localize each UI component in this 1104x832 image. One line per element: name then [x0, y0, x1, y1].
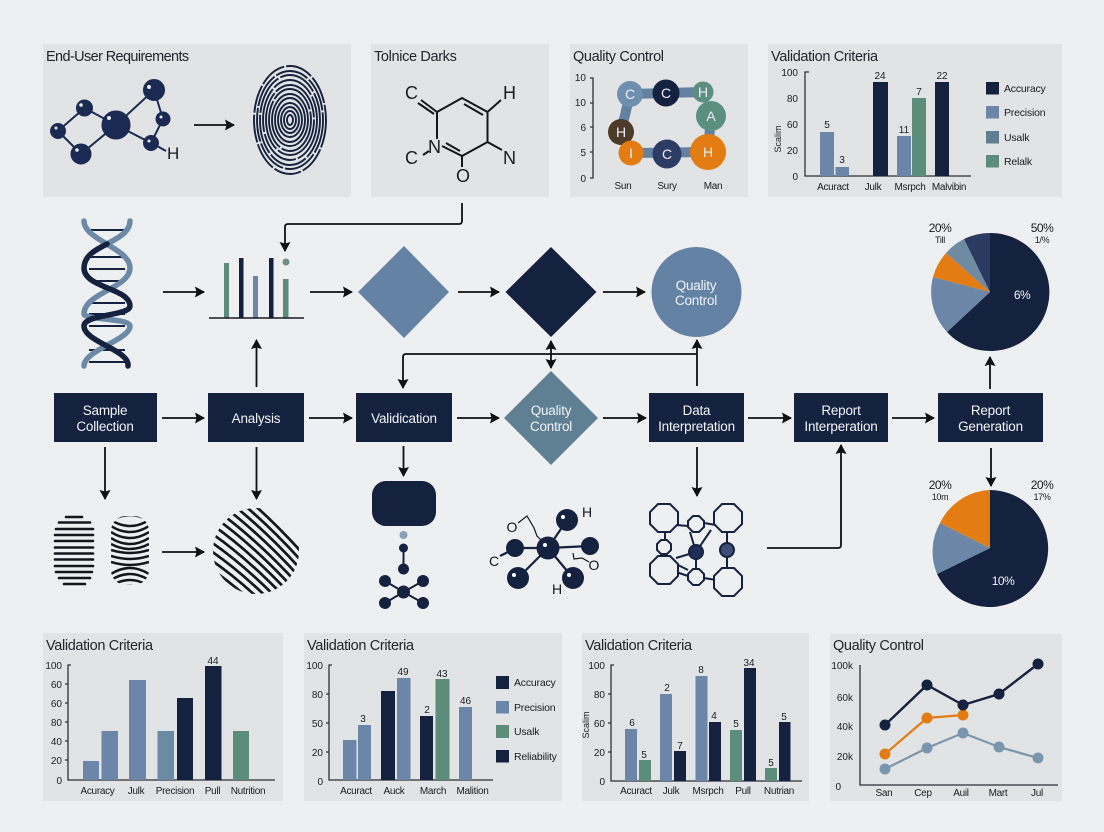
bar chart — [581, 658, 802, 797]
arrow: diamond to navy diamond — [458, 291, 499, 293]
heading: validation criteria: Validation Criteria — [771, 49, 879, 65]
pie chart: upper — [929, 221, 1054, 351]
line chart: Mart — [989, 788, 1008, 799]
line chart: Jul — [1031, 788, 1043, 799]
bar chart: 2 — [664, 683, 670, 694]
bar chart: Julk — [128, 786, 146, 797]
node: quality control circle: Quality — [676, 278, 717, 293]
arrow: dna to chart — [163, 291, 204, 293]
node: quality control diamond — [504, 371, 598, 465]
pie chart: upper: 1/% — [1035, 235, 1050, 245]
panel: end-user requirements — [43, 44, 351, 197]
bar chart: Auck — [383, 786, 406, 797]
arrow — [162, 417, 204, 419]
x labels: Sun — [615, 181, 631, 192]
bar chart: Precision — [156, 786, 194, 797]
legend — [496, 676, 558, 763]
bar chart: 80 — [51, 718, 62, 729]
diamond: navy — [506, 247, 596, 337]
ring of atoms: H — [616, 124, 626, 140]
arrow: navy diamond to circle — [603, 291, 645, 293]
arrow: report up to pie — [989, 357, 991, 389]
bar chart: 5 — [641, 750, 647, 761]
bar chart: 5 — [768, 758, 774, 769]
line chart: 0 — [835, 782, 841, 793]
panel: validation criteria bottom 3 — [581, 633, 809, 801]
bar chart: Julk — [865, 182, 883, 193]
bar chart: 34 — [743, 658, 755, 669]
node: quality control diamond: Quality — [531, 403, 572, 418]
box: report interpretation: Interperation — [804, 419, 878, 434]
pie chart: upper: 50% — [1031, 221, 1054, 235]
panel: validation criteria bottom 2 — [304, 633, 562, 801]
bar chart: 8 — [698, 665, 704, 676]
axis: 10 — [575, 98, 586, 109]
box: report generation: Generation — [958, 419, 1023, 434]
bar chart: 20 — [594, 748, 605, 759]
bar chart: 6 — [629, 718, 635, 729]
icon: molecule — [51, 80, 170, 164]
bar chart: Acuract — [340, 786, 372, 797]
icon: curved fingerprint — [111, 516, 149, 585]
arrow: down from sample collection — [104, 447, 106, 499]
bar chart: 20 — [51, 756, 62, 767]
axis: 10 — [575, 73, 586, 84]
line chart: 60k — [837, 693, 854, 704]
bar chart: 100 — [306, 661, 323, 672]
atom labels — [405, 83, 516, 186]
arrow: down from analysis — [256, 447, 258, 499]
bar chart: 5 — [824, 120, 830, 131]
legend: Usalk — [1004, 132, 1030, 144]
bar chart: 7 — [916, 87, 922, 98]
atom labels: H — [503, 83, 516, 103]
box: validation: Validication — [371, 411, 437, 426]
x labels: Sury — [657, 181, 677, 192]
pie chart: lower — [929, 478, 1054, 607]
arrow — [457, 417, 499, 419]
bar chart — [45, 656, 275, 797]
bar chart: 0 — [792, 172, 798, 183]
bar chart: 3 — [839, 155, 845, 166]
legend: Reliability — [514, 751, 558, 763]
icon: striped fingerprint — [55, 517, 93, 584]
heading: tolnice darks: Tolnice Darks — [374, 49, 457, 65]
atom labels: C — [405, 148, 418, 168]
legend: Accuracy — [514, 677, 557, 689]
line chart: Auil — [953, 788, 969, 799]
arrow — [748, 417, 791, 419]
pie chart: upper: Till — [935, 235, 945, 245]
legend: Accuracy — [1004, 83, 1047, 95]
legend: Precision — [1004, 107, 1046, 119]
heading: Quality Control — [833, 638, 924, 654]
box: analysis — [208, 393, 304, 442]
x labels — [615, 181, 722, 192]
ring of atoms — [608, 80, 726, 170]
arrow: structure panel to chart — [285, 203, 462, 251]
bar chart: Scalim — [581, 711, 591, 739]
line chart: San — [876, 788, 892, 799]
icon: branched molecule: H — [582, 504, 592, 520]
axis — [575, 73, 593, 185]
label: hydrogen: H — [167, 144, 179, 163]
bar chart: 43 — [436, 669, 448, 680]
bar chart: 49 — [397, 667, 409, 678]
box: sample collection: Sample — [83, 403, 127, 418]
connector: feedback loop — [403, 354, 697, 388]
icon: octagon network — [650, 504, 742, 596]
x labels: Man — [704, 181, 722, 192]
node: quality control circle — [652, 247, 742, 337]
ring of atoms: H — [703, 144, 713, 160]
icon: ring structure — [418, 98, 502, 167]
bar chart: Julk — [663, 786, 681, 797]
bar chart: 7 — [677, 741, 683, 752]
panel: chemical structure — [371, 44, 549, 197]
node: quality control circle: Control — [675, 293, 717, 308]
legend: Precision — [514, 702, 556, 714]
box: sample collection — [54, 393, 157, 442]
bar chart: 60 — [787, 120, 798, 131]
bar chart: Msrpch — [895, 182, 925, 193]
box: sample collection: Collection — [76, 419, 134, 434]
ring of atoms: C — [661, 85, 671, 101]
atom labels: N — [428, 137, 441, 157]
panel: validation criteria bottom 1 — [43, 633, 283, 801]
axis: 6 — [580, 123, 586, 134]
legend — [986, 82, 1047, 168]
pie chart: lower: 20% — [1031, 478, 1054, 492]
bar chart: 100 — [45, 661, 62, 672]
pie chart: lower: 17% — [1033, 492, 1051, 502]
arrow: down from report generation — [990, 448, 992, 486]
icon: round fingerprint — [213, 508, 299, 594]
bar chart: 80 — [787, 94, 798, 105]
pie chart: lower: 10m — [932, 492, 948, 502]
bar chart: 0 — [56, 776, 62, 787]
box: data interpretation: Data — [683, 403, 711, 418]
bar chart: Pull — [205, 786, 220, 797]
bar chart: 100 — [588, 661, 605, 672]
icon: branched molecule: C — [489, 553, 499, 569]
arrow: network to report interpretation — [767, 445, 841, 548]
arrow: analysis up to chart — [256, 340, 258, 387]
line chart: 40k — [837, 722, 854, 733]
pie chart: upper: 20% — [929, 221, 952, 235]
box: data interpretation: Interpretation — [658, 419, 735, 434]
arrow — [892, 417, 934, 419]
icon: fingerprint — [254, 66, 326, 174]
ring of atoms: C — [662, 146, 672, 162]
box: analysis: Analysis — [232, 411, 281, 426]
box: report generation — [938, 393, 1043, 442]
bar chart: 46 — [460, 696, 471, 707]
arrow: down from interpretation — [696, 447, 698, 496]
bar chart: 2 — [424, 705, 430, 716]
legend: Usalk — [514, 726, 540, 738]
arrow: chart to diamond — [310, 291, 352, 293]
axis: 5 — [580, 148, 586, 159]
bar chart — [306, 661, 493, 797]
bar chart: Acuract — [817, 182, 849, 193]
legend: Relalk — [1004, 156, 1033, 168]
bar chart: 11 — [899, 125, 910, 136]
bar chart: 80 — [312, 690, 323, 701]
atom labels: C — [405, 83, 418, 103]
arrow: interpretation up to circle — [696, 340, 698, 386]
atom labels: O — [456, 166, 470, 186]
line chart: 100k — [831, 661, 854, 672]
bar chart: Nutrian — [764, 786, 794, 797]
bar chart — [773, 68, 971, 193]
ring of atoms: I — [629, 145, 633, 161]
bar chart: Acuract — [620, 786, 652, 797]
pie chart: lower: 10% — [992, 574, 1015, 588]
icon: branched molecule: O — [507, 519, 518, 535]
bar chart: 0 — [599, 777, 605, 788]
bar chart: 5 — [781, 712, 787, 723]
bar chart: Scalim — [773, 125, 783, 153]
arrow: double between diamonds — [550, 341, 552, 368]
icon: mini bar chart — [209, 258, 304, 318]
box: validation — [356, 393, 452, 442]
box: data interpretation — [649, 393, 744, 442]
bar chart: 40 — [51, 737, 62, 748]
diamond: steel blue — [358, 246, 449, 338]
bar chart: 24 — [874, 71, 886, 82]
panel: quality control line chart — [830, 634, 1062, 801]
bar chart: 44 — [207, 656, 219, 667]
node: quality control diamond: Control — [530, 419, 572, 434]
ring of atoms: A — [706, 108, 716, 124]
box: report interpretation: Report — [821, 403, 861, 418]
bar chart: Acuracy — [80, 786, 115, 797]
bar chart: March — [420, 786, 446, 797]
heading: end-user requirements: End-User Requirements — [46, 49, 189, 65]
bar chart: Pull — [735, 786, 751, 797]
bar chart: 0 — [317, 777, 323, 788]
box: report interpretation — [794, 393, 888, 442]
arrow — [603, 417, 646, 419]
panel: quality control molecule chart — [570, 44, 748, 197]
icon: rounded block with molecule — [372, 481, 436, 609]
bar chart: 60 — [51, 680, 62, 691]
bar chart: 3 — [360, 714, 366, 725]
bar chart: 80 — [594, 690, 605, 701]
bar chart: 22 — [936, 71, 948, 82]
icon: dna helix — [84, 221, 130, 366]
heading: Validation Criteria — [46, 638, 154, 654]
line chart — [831, 658, 1058, 799]
bar chart: Msrpch — [693, 786, 723, 797]
arrow — [309, 417, 352, 419]
bar chart: 100 — [781, 68, 798, 79]
bar chart: 60 — [594, 719, 605, 730]
arrow: fingerprints to disc — [162, 551, 204, 553]
bar chart: 20 — [787, 146, 798, 157]
arrow: down from validation — [402, 446, 404, 476]
pie chart: upper: 6% — [1014, 288, 1031, 302]
icon: branched molecule — [489, 504, 600, 597]
ring of atoms: H — [698, 84, 708, 100]
heading: quality control: Quality Control — [573, 49, 664, 65]
arrow: molecule to fingerprint — [194, 124, 234, 126]
pie chart: lower: 20% — [929, 478, 952, 492]
box: report generation: Report — [971, 403, 1011, 418]
bar chart: 4 — [711, 711, 717, 722]
icon: branched molecule: H — [552, 581, 562, 597]
bar chart: 5 — [733, 719, 739, 730]
ring of atoms: C — [625, 86, 635, 102]
bar chart: Malition — [456, 786, 489, 797]
panel: validation criteria top — [768, 44, 1062, 197]
bar chart: 20 — [312, 748, 323, 759]
line chart: Cep — [914, 788, 932, 799]
bar chart: Nutrition — [231, 786, 265, 797]
heading: Validation Criteria — [585, 638, 693, 654]
atom labels: N — [503, 148, 516, 168]
icon: branched molecule: O — [589, 557, 600, 573]
bar chart: Malvibin — [932, 182, 966, 193]
bar chart: 60 — [51, 699, 62, 710]
axis: 0 — [580, 174, 586, 185]
line chart: 20k — [837, 752, 854, 763]
bar chart: 50 — [312, 719, 323, 730]
heading: Validation Criteria — [307, 638, 415, 654]
